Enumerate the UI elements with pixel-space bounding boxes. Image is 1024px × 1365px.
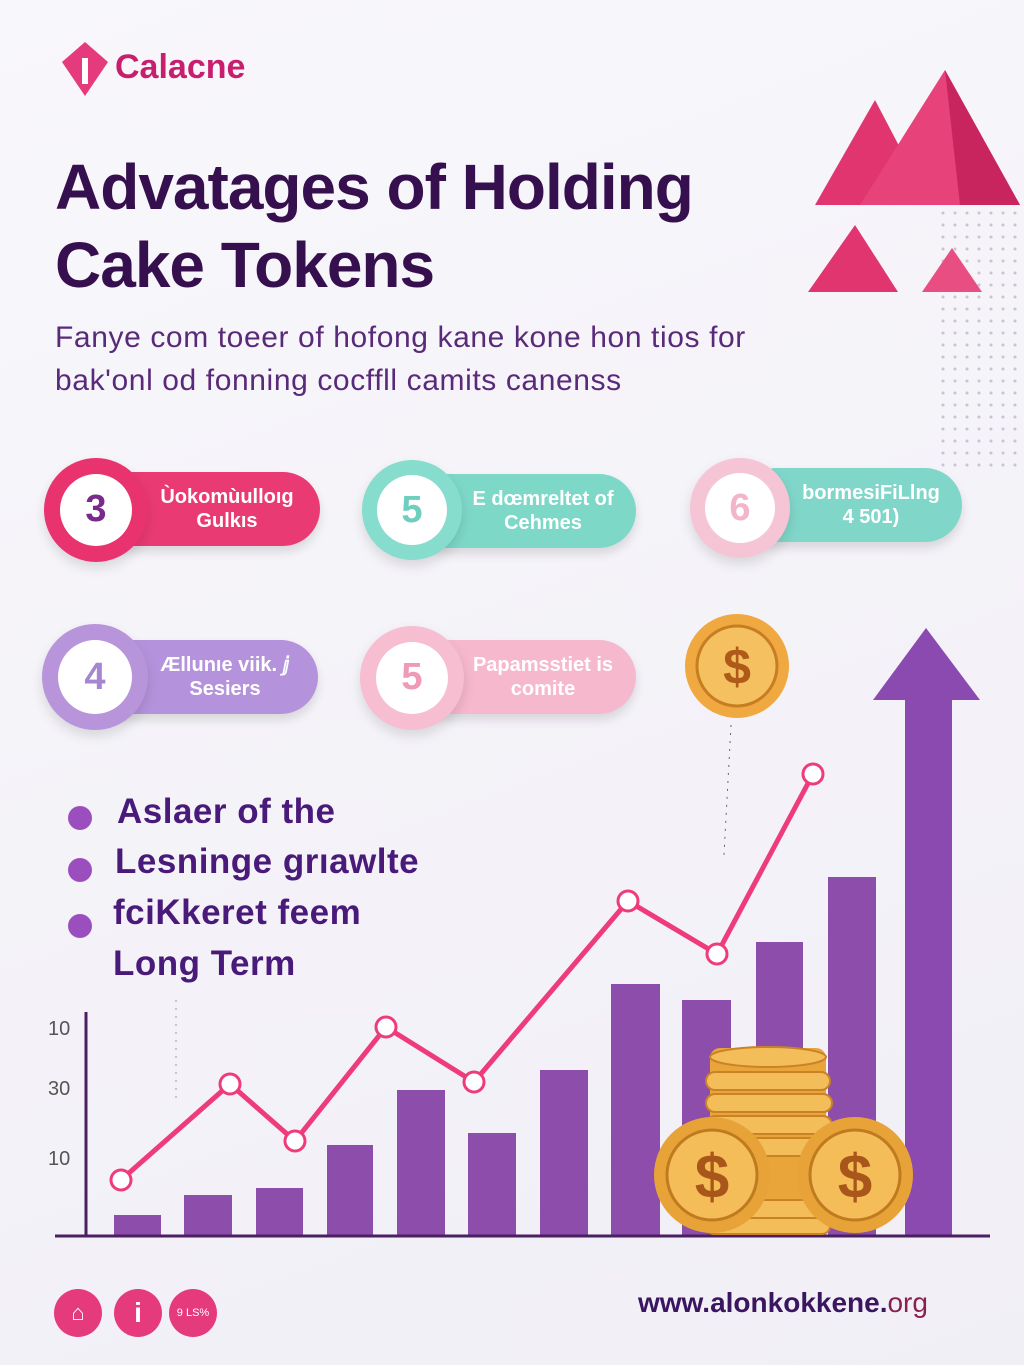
pill 2: Cehmes [504,512,582,534]
coin icon [685,614,789,718]
bullet list: Aslaer of the [117,792,336,831]
pill 5: Papamsstiet is [473,654,613,676]
footer icons: 9 LS% [177,1307,209,1319]
pill 3: bormesiFiLlng [802,482,940,504]
pill 5: 5 [401,656,423,698]
bullet list: fciKkeret feem [113,893,361,932]
dotted pattern [942,212,1016,466]
pill 4: Ællunıe viik. ⅉ [160,654,290,676]
pill 1: Ùokomùulloıg [160,486,294,508]
subtitle: bak'onl od fonning cocffll camits canenss [55,364,622,397]
pill 4 [39,624,320,739]
pill 2: E dœmreltet of [472,488,614,510]
coin stack [654,1047,913,1235]
chart: 30 [48,1078,70,1100]
bullet list [68,792,419,983]
pill 1: 3 [85,488,107,530]
chart: 10 [48,1148,70,1170]
coin icon: $ [723,639,751,695]
website url: www.alonkokkene.org [638,1287,928,1318]
pill 1: Gulkıs [196,510,258,532]
subtitle: Fanye com toeer of hofong kane kone hon tios for [55,321,746,354]
footer icons: ⌂ [71,1300,85,1325]
growth arrow [873,628,980,1235]
coin stack: $ [695,1143,729,1212]
pill 3: 4 501) [843,506,899,528]
coin stack: $ [838,1143,872,1212]
pill 2 [359,460,638,569]
pill 3 [687,458,964,567]
bullet list: Lesninge grıawlte [115,842,419,881]
footer icons [54,1289,217,1337]
logo [62,42,245,96]
subtitle [55,321,746,397]
pill 4: 4 [84,656,106,698]
decorative mountains [808,70,1020,292]
pill 5: comite [511,678,575,700]
bullet list: Long Term [113,944,296,983]
pill 1 [41,458,322,571]
pill 2: 5 [401,488,423,530]
footer icons: i [134,1297,142,1328]
title: Advatages of Holding [55,151,693,223]
chart [48,628,990,1238]
chart: 10 [48,1018,70,1040]
title [55,151,693,301]
pill 4: Sesiers [189,678,261,700]
logo: Calacne [115,48,245,86]
pill 3: 6 [729,486,751,528]
title: Cake Tokens [55,229,434,301]
pill 5 [357,626,638,739]
